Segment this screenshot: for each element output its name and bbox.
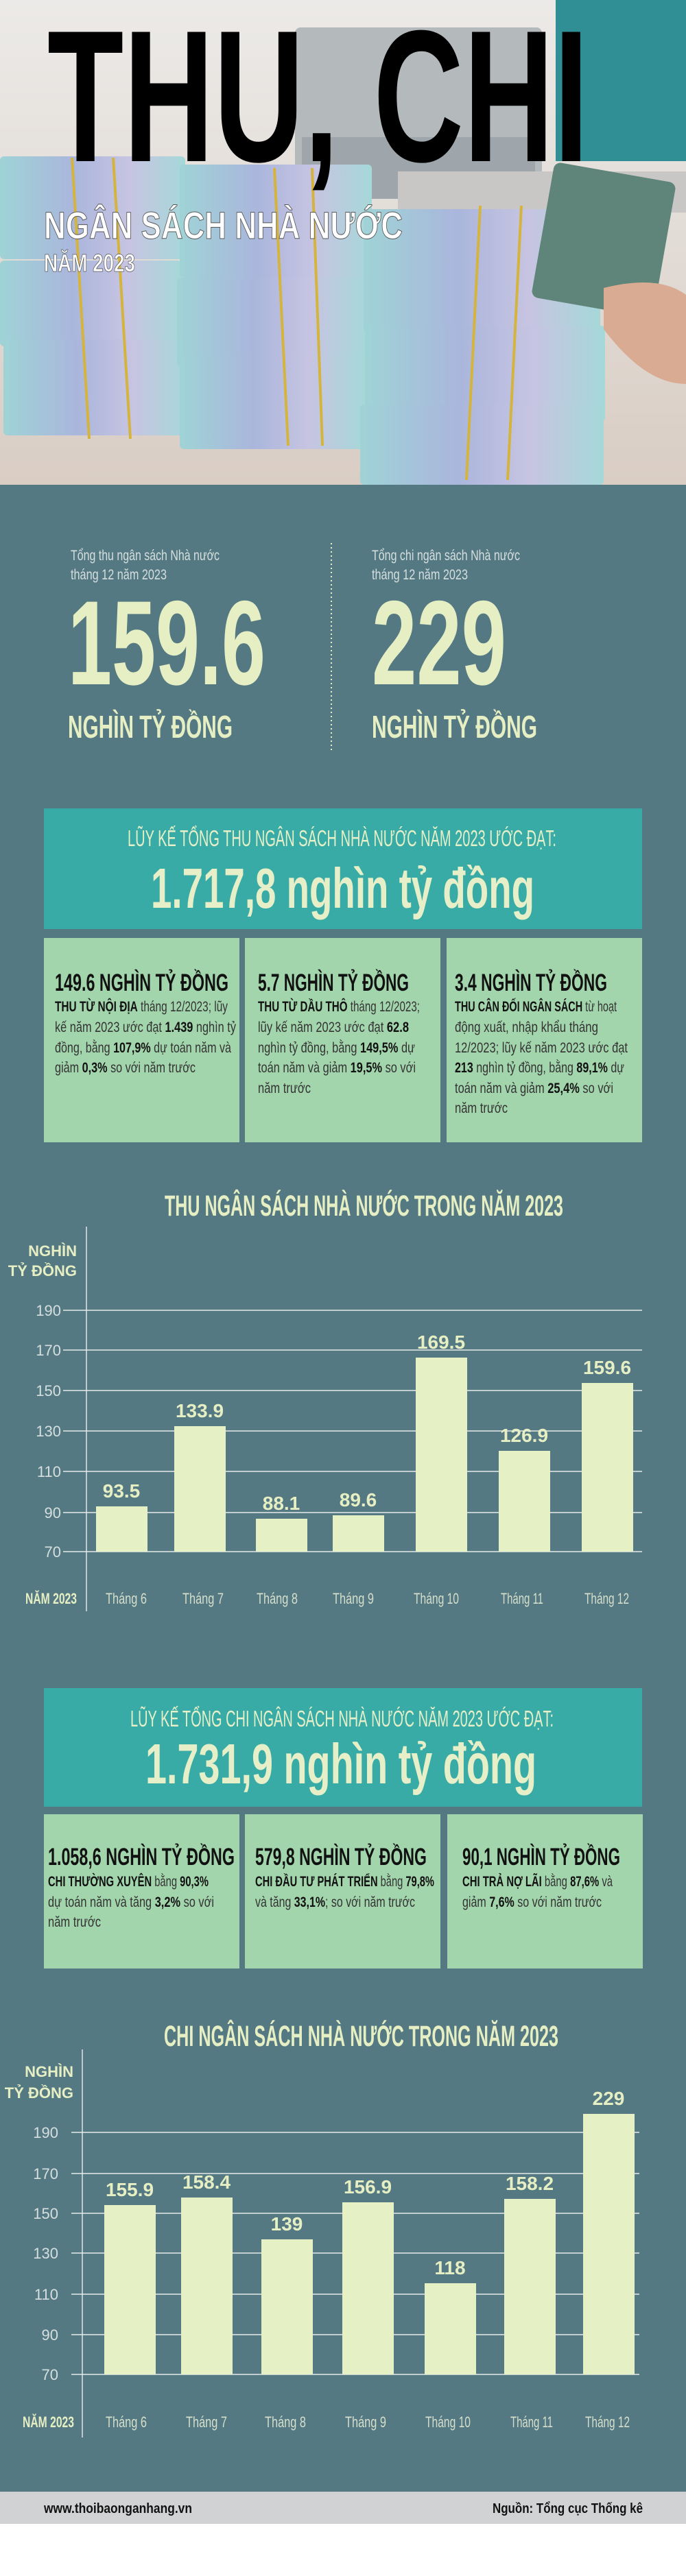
- bar chart: chi ngân sách: 155.9: [106, 2179, 154, 2200]
- bar chart: chi ngân sách: 70: [42, 2366, 58, 2383]
- panel: chi đầu tư phát triển: 579,8 NGHÌN TỶ ĐỒNG: [255, 1843, 427, 1870]
- bar chart: chi ngân sách: Tháng 8: [265, 2414, 306, 2431]
- stat: tổng thu: [68, 548, 265, 745]
- bar chart: chi ngân sách: NGHÌN: [25, 2063, 73, 2080]
- bar chart: chi ngân sách: TỶ ĐỒNG: [5, 2084, 73, 2102]
- stat: tổng thu: 159.6: [68, 577, 265, 710]
- panel: chi đầu tư phát triển: và tăng 33,1%; so với năm trước: [255, 1894, 415, 1910]
- panel: chi trả nợ lãi: CHI TRẢ NỢ LÃI bằng 87,6% và: [462, 1874, 613, 1890]
- panel: thu dầu thô: THU TỪ DẦU THÔ tháng 12/2023;: [258, 998, 420, 1015]
- panel: thu cân đối xuất nhập khẩu: động xuất, nhập khẩu tháng: [455, 1020, 598, 1035]
- subtitle: ngân sách nhà nước: NGÂN SÁCH NHÀ NƯỚC: [44, 204, 403, 247]
- panel: chi thường xuyên: dự toán năm và tăng 3,2% so với: [48, 1894, 214, 1910]
- bar chart: chi ngân sách: 139: [271, 2213, 303, 2235]
- panel: thu dầu thô: năm trước: [258, 1081, 311, 1096]
- bar chart: thu ngân sách: Tháng 11: [501, 1590, 543, 1607]
- panel: thu dầu thô: nghìn tỷ đồng, bằng 149,5% dự: [258, 1040, 415, 1056]
- bar chart: chi ngân sách: Tháng 12: [585, 2414, 630, 2431]
- panel: thu cân đối xuất nhập khẩu: 12/2023; lũy kế năm 2023 ước đạt: [455, 1040, 628, 1056]
- panel: chi thường xuyên: CHI THƯỜNG XUYÊN bằng 90,3%: [48, 1873, 209, 1890]
- bar chart: chi ngân sách: Tháng 10: [425, 2414, 471, 2431]
- panel: chi thường xuyên: [44, 1814, 239, 1969]
- bar chart: thu ngân sách: Tháng 9: [333, 1590, 374, 1607]
- bar chart: thu ngân sách: Tháng 12: [584, 1590, 629, 1607]
- bar chart: thu ngân sách: 133.9: [176, 1400, 224, 1421]
- panel: thu nội địa: [44, 938, 239, 1142]
- bar chart: thu ngân sách: 90: [45, 1504, 61, 1521]
- bar chart: chi ngân sách: 158.2: [506, 2173, 554, 2194]
- bar chart: chi ngân sách: 150: [33, 2205, 58, 2222]
- bar chart: thu ngân sách: 159.6: [583, 1357, 631, 1378]
- bar chart: thu ngân sách: 190: [36, 1302, 61, 1319]
- bar chart: chi ngân sách: 110: [34, 2286, 58, 2303]
- panel: chi trả nợ lãi: [447, 1814, 643, 1969]
- bar chart: thu ngân sách: 88.1: [263, 1493, 300, 1514]
- stat: tổng thu: NGHÌN TỶ ĐỒNG: [68, 709, 233, 745]
- bar chart: thu ngân sách: 89.6: [340, 1489, 377, 1510]
- banner: lũy kế chi: [44, 1688, 642, 1807]
- bar chart: thu ngân sách: 169.5: [417, 1332, 465, 1353]
- panel: chi trả nợ lãi: giảm 7,6% so với năm trước: [462, 1894, 602, 1910]
- panel: chi đầu tư phát triển: [245, 1814, 440, 1969]
- main background: [0, 485, 686, 2492]
- bar chart: chi ngân sách: 229: [593, 2088, 624, 2109]
- divider: [331, 543, 332, 752]
- subtitle: năm 2023: NĂM 2023: [44, 249, 135, 277]
- panel: thu cân đối xuất nhập khẩu: [447, 938, 642, 1142]
- panel: thu cân đối xuất nhập khẩu: toán năm và giảm 25,4% so với: [455, 1081, 613, 1096]
- stat: tổng chi: Tổng chi ngân sách Nhà nước: [372, 548, 520, 564]
- bar chart: thu ngân sách: [8, 1227, 642, 1611]
- panel: chi thường xuyên: 1.058,6 NGHÌN TỶ ĐỒNG: [48, 1843, 235, 1870]
- bar chart: chi ngân sách: Tháng 11: [510, 2414, 553, 2431]
- panel: chi thường xuyên: năm trước: [48, 1914, 101, 1930]
- panel: thu dầu thô: toán năm và giảm 19,5% so với: [258, 1060, 416, 1076]
- panel: thu dầu thô: 5.7 NGHÌN TỶ ĐỒNG: [258, 969, 409, 996]
- bar chart: thu ngân sách: 150: [36, 1382, 61, 1399]
- bar chart: chi ngân sách: 190: [33, 2124, 58, 2141]
- stat: tổng chi: [372, 548, 537, 745]
- footer bar: Nguồn: Tổng cục Thống kê: [493, 2501, 643, 2516]
- stat: tổng chi: tháng 12 năm 2023: [372, 567, 468, 583]
- bar chart: chi ngân sách: 90: [42, 2326, 58, 2344]
- bar chart: chi ngân sách: Tháng 9: [345, 2414, 386, 2431]
- bar chart: chi ngân sách: 158.4: [182, 2171, 230, 2193]
- panel: thu nội địa: THU TỪ NỘI ĐỊA tháng 12/2023; lũy: [55, 998, 228, 1015]
- bar chart: chi ngân sách: 118: [434, 2257, 466, 2278]
- panel: thu cân đối xuất nhập khẩu: 3.4 NGHÌN TỶ ĐỒNG: [455, 969, 607, 996]
- footer bar: www.thoibaonganhang.vn: [43, 2501, 192, 2516]
- bar chart: thu ngân sách: 126.9: [500, 1425, 548, 1446]
- bar chart: thu ngân sách: 130: [36, 1423, 61, 1440]
- bar chart: chi ngân sách: [5, 2049, 639, 2437]
- bar chart: thu ngân sách: 110: [37, 1463, 61, 1480]
- stat: tổng chi: 229: [372, 577, 506, 710]
- panel: thu dầu thô: [245, 938, 440, 1142]
- bar chart: thu ngân sách: Tháng 10: [414, 1590, 459, 1607]
- bar chart: thu ngân sách: NĂM 2023: [25, 1590, 77, 1607]
- stat: tổng thu: Tổng thu ngân sách Nhà nước: [71, 548, 220, 564]
- panel: thu nội địa: giảm 0,3% so với năm trước: [55, 1060, 196, 1076]
- bar chart: thu ngân sách: Tháng 6: [106, 1590, 147, 1607]
- bar chart: chi ngân sách: NĂM 2023: [23, 2414, 74, 2431]
- panel: thu cân đối xuất nhập khẩu: THU CÂN ĐỐI NGÂN SÁCH từ hoạt: [455, 998, 617, 1015]
- panel: thu cân đối xuất nhập khẩu: năm trước: [455, 1100, 508, 1116]
- panel: thu nội địa: 149.6 NGHÌN TỶ ĐỒNG: [55, 969, 228, 996]
- stat: tổng thu: tháng 12 năm 2023: [71, 567, 167, 583]
- panel: thu cân đối xuất nhập khẩu: 213 nghìn tỷ đồng, bằng 89,1% dự: [455, 1060, 624, 1076]
- bar chart: chi ngân sách: 130: [33, 2245, 58, 2262]
- bar chart: thu ngân sách: 70: [45, 1543, 61, 1561]
- panel: thu dầu thô: lũy kế năm 2023 ước đạt 62.8: [258, 1020, 409, 1035]
- hero photo: [0, 0, 686, 485]
- bar chart: thu ngân sách: Tháng 8: [257, 1590, 298, 1607]
- bar chart: chi ngân sách: Tháng 7: [186, 2414, 227, 2431]
- panel: thu nội địa: đồng, bằng 107,9% dự toán năm và: [55, 1040, 231, 1056]
- panel: thu nội địa: kế năm 2023 ước đạt 1.439 nghìn tỷ: [55, 1020, 236, 1035]
- bar chart: thu ngân sách: TỶ ĐỒNG: [8, 1262, 77, 1279]
- bar chart: thu ngân sách: 93.5: [103, 1480, 140, 1502]
- stat: tổng chi: NGHÌN TỶ ĐỒNG: [372, 709, 537, 745]
- bar chart: chi ngân sách: 170: [33, 2165, 58, 2182]
- footer bar: [0, 2492, 686, 2524]
- bar chart: thu ngân sách: 170: [36, 1342, 61, 1359]
- banner: lũy kế thu: [44, 808, 642, 929]
- bar chart: thu ngân sách: NGHÌN: [28, 1242, 77, 1260]
- bar chart: chi ngân sách: 156.9: [344, 2176, 392, 2198]
- panel: chi đầu tư phát triển: CHI ĐẦU TƯ PHÁT TRIỂN bằng 79,8%: [255, 1874, 434, 1890]
- bar chart: chi ngân sách: Tháng 6: [106, 2414, 147, 2431]
- bar chart: thu ngân sách: Tháng 7: [182, 1590, 224, 1607]
